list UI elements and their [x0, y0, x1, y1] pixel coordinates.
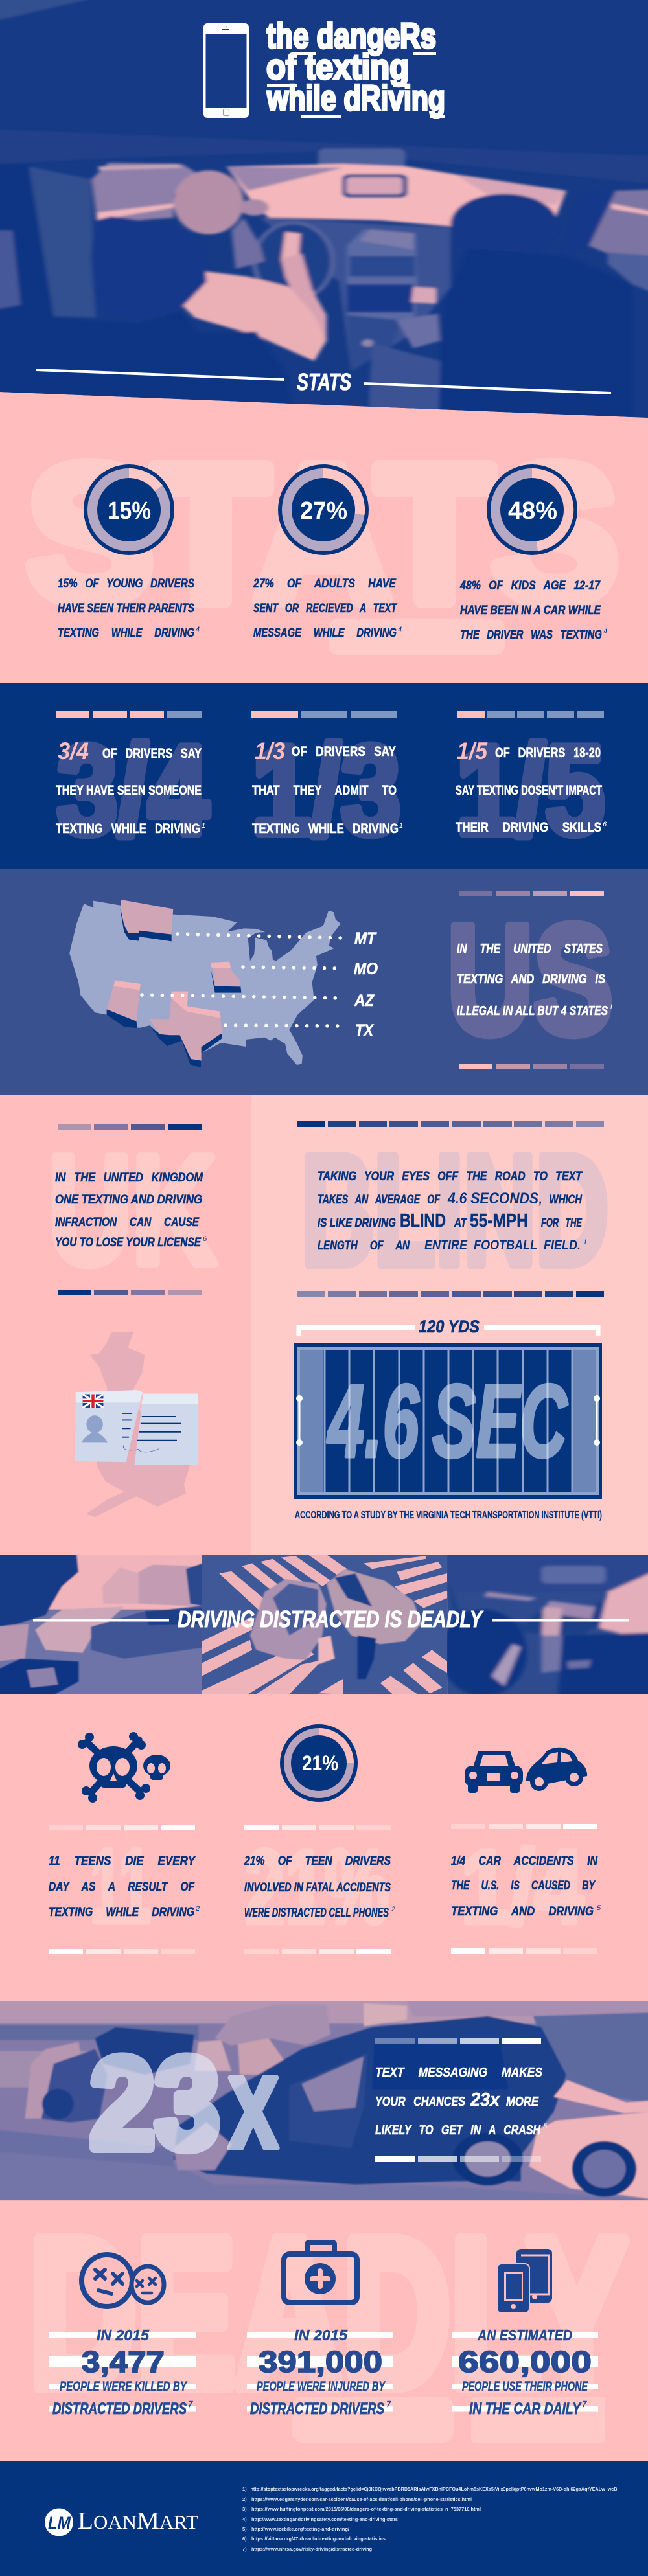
text: young drivers: 4	[196, 626, 200, 633]
text: 23x more likely: 5	[543, 2123, 548, 2130]
ghost numerals: fractions	[57, 720, 605, 861]
text: adults: 27% OF ADULTS HAVE	[253, 577, 397, 591]
source list: 1)	[242, 2486, 247, 2492]
text: blind driving stat: LENGTH OF AN	[318, 1239, 410, 1253]
text: one third	[252, 738, 403, 836]
stat: injured: 7	[386, 2399, 391, 2409]
text: US law: TEXTING AND DRIVING IS	[457, 972, 606, 986]
text: blind driving stat: BLIND	[400, 1211, 446, 1231]
text: blind driving stat	[318, 1170, 587, 1253]
state labels: AZ	[354, 992, 375, 1010]
state labels: MO	[354, 960, 378, 978]
text: UK law: ONE TEXTING AND DRIVING	[55, 1193, 202, 1207]
text: kids: 4	[603, 628, 607, 635]
donut: 27%: 27%	[300, 497, 347, 525]
ghost numerals: fractions: 1/5	[456, 720, 605, 861]
stat: injured	[250, 2327, 391, 2418]
icon: dizzy faces	[82, 2255, 164, 2307]
text: one third: TEXTING WHILE DRIVING	[252, 821, 399, 836]
panel: national numbers	[29, 2195, 627, 2443]
text: UK law: INFRACTION CAN CAUSE	[55, 1216, 200, 1229]
text: car accidents: 5	[597, 1904, 601, 1912]
text: young drivers: 15% OF YOUNG DRIVERS	[58, 577, 194, 591]
text: three quarters: THEY HAVE SEEN SOMEONE	[56, 783, 202, 798]
text: three quarters	[56, 738, 205, 836]
text: blind driving stat: IS LIKE DRIVING	[318, 1216, 396, 1230]
source list: 5)	[242, 2526, 247, 2532]
heading: stats: STATS	[297, 369, 351, 395]
stat: phone users: AN ESTIMATED	[477, 2327, 572, 2343]
text: young drivers	[58, 577, 200, 640]
stat: killed: 7	[188, 2399, 193, 2409]
text: blind driving stat: 1	[583, 1238, 587, 1246]
stat: killed: IN 2015	[97, 2327, 150, 2343]
donut: 48%	[487, 464, 577, 555]
donut: 21%: 21%	[302, 1751, 338, 1775]
title	[266, 16, 445, 118]
ghost figure: 23x: x	[228, 2028, 279, 2176]
source list: https://vittana.org/47-dreadful-texting-and-driving-statistics	[251, 2536, 386, 2542]
footer background	[0, 2461, 648, 2576]
donut: 48%: 48%	[508, 497, 557, 525]
text: UK law	[55, 1171, 207, 1249]
text: US law: ILLEGAL IN ALL BUT 4 STATES	[457, 1004, 608, 1018]
logo: LoanMart: LM	[48, 2513, 71, 2533]
state labels	[354, 929, 378, 1040]
source list: 3)	[242, 2506, 247, 2512]
progress bar: one fifth	[457, 711, 604, 718]
text: teen drivers: WERE DISTRACTED CELL PHONES	[244, 1906, 389, 1920]
text: teen drivers: 21% OF TEEN DRIVERS	[244, 1854, 391, 1868]
text: US law	[457, 942, 613, 1018]
state labels: MT	[354, 929, 377, 948]
panel: deadly statistics	[49, 1724, 601, 1954]
text: 23x more likely: TEXT MESSAGING MAKES	[375, 2066, 543, 2080]
ghost numerals: 21%	[245, 1829, 389, 1944]
text: kids: HAVE BEEN IN A CAR WHILE	[460, 604, 601, 617]
stat: injured: IN 2015	[294, 2327, 348, 2343]
text: teen drivers	[244, 1854, 395, 1920]
text: young drivers: TEXTING WHILE DRIVING	[58, 626, 194, 640]
source list: https://www.huffingtonpost.com/2015/06/08/dangers-of-texting-and-driving-statistics_n_7537710.html	[251, 2506, 481, 2512]
source list: http://www.textinganddrivingsafety.com/texting-and-driving-stats	[251, 2516, 398, 2522]
source list: https://www.nhtsa.gov/risky-driving/distracted-driving	[251, 2546, 372, 2552]
hero: header with in-car photo	[0, 0, 648, 425]
text: car accidents: TEXTING AND DRIVING	[451, 1905, 594, 1919]
text: teens die: 11 TEENS DIE EVERY	[49, 1854, 196, 1868]
progress bar: three quarters	[56, 711, 202, 718]
title: the dangeRs	[266, 16, 436, 56]
football field graphic	[294, 1343, 602, 1499]
text: blind driving stat: ENTIRE FOOTBALL FIELD.	[424, 1238, 581, 1253]
text: UK law: IN THE UNITED KINGDOM	[55, 1171, 203, 1185]
stat: phone users: IN THE CAR DAILY	[469, 2400, 582, 2418]
title: of texting	[266, 47, 409, 87]
text: one third: THAT THEY ADMIT TO	[252, 783, 397, 798]
text: one fifth: OF DRIVERS 18-20	[495, 746, 601, 760]
text: one third: OF DRIVERS SAY	[292, 744, 396, 759]
navy background	[0, 683, 648, 869]
bars bottom	[375, 2156, 541, 2162]
stat: killed: PEOPLE WERE KILLED BY	[60, 2379, 187, 2394]
source list: https://www.edgarsnyder.com/car-accident/cause-of-accident/cell-phone/cell-phone-statistics.html	[251, 2496, 472, 2502]
donut: 15%	[84, 464, 174, 555]
source list: 2)	[242, 2496, 247, 2502]
panel: united states	[0, 869, 648, 1095]
text: one fifth: 1/5	[457, 738, 488, 764]
text: UK law: 6	[203, 1235, 207, 1243]
ghost numerals: fractions: 1/3	[252, 720, 400, 861]
source list: 7)	[242, 2546, 247, 2552]
icon: first aid kit	[284, 2242, 357, 2303]
label: 120 yards bracket	[299, 1317, 598, 1336]
ghost numerals: 11	[90, 1828, 151, 1944]
bar bottom	[58, 1290, 202, 1295]
photo band: 23x crash	[0, 1998, 648, 2204]
text: 23x more likely: MORE	[506, 2095, 539, 2109]
text: blind driving stat: FOR THE	[541, 1216, 583, 1230]
bar top	[459, 891, 604, 896]
panel: blind driving	[251, 1095, 648, 1555]
text: one third: 1	[399, 822, 403, 830]
text: adults: 4	[398, 626, 402, 633]
icon: UK map silhouette and torn licence	[75, 1332, 198, 1517]
ghost figure: 23x: 23	[90, 2031, 220, 2176]
background	[0, 869, 648, 1095]
heading: driving distracted is deadly	[33, 1606, 629, 1632]
bars: teen drivers	[244, 1825, 391, 1954]
text: teen drivers: 2	[391, 1906, 395, 1913]
text: adults	[253, 577, 402, 640]
text: three quarters: TEXTING WHILE DRIVING	[56, 821, 200, 836]
text: three quarters: 3/4	[58, 738, 89, 764]
background	[0, 1095, 251, 1555]
ghost word: stats: STATS	[27, 426, 618, 642]
text: three quarters: 1	[202, 822, 205, 830]
stat: killed: 3,477	[82, 2345, 165, 2378]
stat: phone users: 660,000	[458, 2345, 592, 2378]
heading: driving distracted is deadly: DRIVING DISTRACTED IS DEADLY	[178, 1606, 483, 1632]
text: teens die: TEXTING WHILE DRIVING	[49, 1906, 194, 1919]
text: blind driving stat: 55-MPH	[470, 1211, 528, 1231]
bar bottom	[459, 1064, 604, 1069]
hero background	[0, 0, 648, 421]
label: 120 yards bracket: 120 YDS	[419, 1317, 480, 1336]
donut: 15%: 15%	[108, 497, 151, 525]
text: blind driving stat: AT	[454, 1216, 467, 1230]
text: kids: THE DRIVER WAS TEXTING	[460, 628, 602, 642]
footer	[0, 2461, 648, 2576]
stat: killed: DISTRACTED DRIVERS	[52, 2400, 187, 2418]
ghost word: UK: UK	[48, 1124, 216, 1296]
text: blind driving stat: TAKING YOUR EYES OFF THE ROAD TO TEXT	[318, 1170, 583, 1183]
source list: 4)	[242, 2516, 247, 2522]
text: young drivers: HAVE SEEN THEIR PARENTS	[58, 602, 194, 615]
stat: killed	[52, 2327, 193, 2418]
ghost numerals: fractions: 3/4	[57, 720, 209, 861]
text: car accidents: THE U.S. IS CAUSED BY	[451, 1879, 596, 1893]
text: car accidents	[451, 1854, 601, 1919]
text: 23x more likely: YOUR CHANCES	[375, 2095, 466, 2109]
text: 23x more likely	[375, 2066, 548, 2137]
white bars behind text	[49, 2332, 598, 2412]
stat: injured: DISTRACTED DRIVERS	[250, 2400, 384, 2418]
text: US law: 1	[609, 1003, 613, 1011]
text: adults: MESSAGE WHILE DRIVING	[253, 626, 397, 640]
text: one fifth: 6	[603, 821, 607, 828]
stat: injured: PEOPLE WERE INJURED BY	[257, 2379, 386, 2394]
dotted leader lines	[142, 934, 341, 1026]
ghost numerals: 1/4	[461, 1829, 583, 1944]
text: one fifth	[456, 738, 607, 835]
text: UK law: YOU TO LOSE YOUR LICENSE	[55, 1236, 202, 1249]
text: car accidents: 1/4 CAR ACCIDENTS IN	[451, 1854, 598, 1868]
text: teens die	[49, 1854, 200, 1919]
bars: accidents	[451, 1824, 597, 1954]
text: 23x more likely: 23x	[470, 2090, 501, 2110]
state labels: TX	[355, 1021, 374, 1040]
in-car photo	[0, 0, 648, 425]
text: US law: IN THE UNITED STATES	[457, 942, 603, 956]
title: while dRiving	[266, 78, 445, 118]
stat: phone users: PEOPLE USE THEIR PHONE	[462, 2379, 588, 2394]
stat: phone users	[458, 2327, 592, 2418]
text: 23x more likely: LIKELY TO GET IN A CRASH	[375, 2123, 540, 2137]
panel: stats percentages	[27, 426, 618, 655]
text: one fifth: THEIR DRIVING SKILLS	[456, 820, 601, 835]
bar top	[297, 1121, 604, 1127]
logo: LoanMart: LOANMART	[78, 2507, 198, 2535]
icon: smartphone	[203, 23, 249, 118]
US map with four highlighted states	[69, 900, 341, 1067]
source list: http://www.icebike.org/texting-and-driving/	[251, 2526, 350, 2532]
donut: 21%	[280, 1724, 358, 1802]
photo collage	[0, 1552, 648, 1697]
crash scene photo	[0, 1998, 648, 2204]
source list: http://stoptextsstopwrecks.org/tagged/facts?gclid=Cj0KCQjwvabPBRD5ARIsAIwFXBnIPCFOu4Lohm8sKEXs5jViix3pelkjptP6hvwMo1zm-V6D-qhl62gaAqfYEALw_wcB	[250, 2486, 618, 2492]
text: three quarters: OF DRIVERS SAY	[102, 746, 202, 761]
icon: two phones	[497, 2249, 552, 2313]
stat: injured: 391,000	[259, 2345, 382, 2378]
bar top	[58, 1124, 202, 1130]
text: kids: 48% OF KIDS AGE 12-17	[459, 579, 601, 593]
text: teen drivers: INVOLVED IN FATAL ACCIDENTS	[244, 1881, 391, 1895]
text: blind driving stat: 4.6 SECONDS	[447, 1190, 538, 1207]
icon: skulls	[78, 1732, 170, 1803]
icon: colliding cars	[465, 1748, 587, 1793]
panel: fractions	[0, 683, 648, 869]
heading: stats	[36, 369, 611, 395]
text: teens die: DAY AS A RESULT OF	[49, 1880, 195, 1894]
progress bar: one third	[251, 711, 397, 718]
ghost numerals	[90, 1828, 583, 1944]
bars top	[375, 2038, 541, 2044]
text: blind driving stat: , WHICH	[538, 1193, 583, 1207]
background	[251, 1095, 648, 1555]
source list	[242, 2486, 618, 2552]
stat: phone users: 7	[582, 2399, 587, 2409]
source list: 6)	[242, 2536, 247, 2542]
donut: 27%	[278, 464, 369, 555]
photo band: driving distracted is deadly	[0, 1552, 648, 1697]
text: one third: 1/3	[255, 738, 285, 764]
bars: teens	[49, 1825, 195, 1954]
text: adults: SENT OR RECIEVED A TEXT	[253, 602, 397, 615]
text: kids	[459, 579, 607, 642]
text: teens die: 2	[195, 1905, 200, 1913]
text: blind driving stat: TAKES AN AVERAGE OF	[318, 1193, 441, 1207]
panel: united kingdom	[0, 1095, 251, 1555]
bar bottom	[297, 1291, 604, 1297]
